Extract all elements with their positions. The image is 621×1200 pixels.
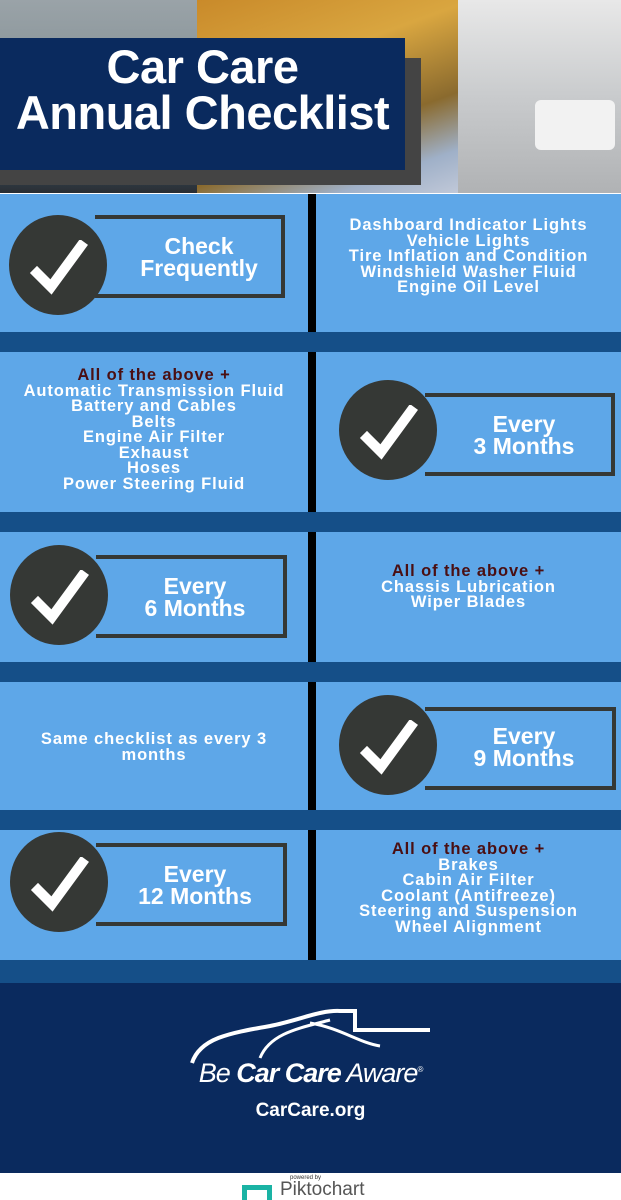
text: 6 month list: Wiper Blades: [411, 593, 526, 611]
text: 3 month list: Power Steering Fluid: [63, 474, 245, 492]
badge: every 9 months: Every: [493, 723, 555, 749]
piktochart: [242, 1174, 364, 1200]
text: frequent list: [348, 216, 588, 296]
text: 9 month: [41, 730, 267, 764]
badge: every 6 months: 6 Months: [145, 595, 245, 621]
text: 3 month list: Engine Air Filter: [83, 428, 225, 446]
panels: [0, 194, 308, 332]
badge: every 12 months: Every: [164, 861, 226, 887]
text: frequent list: Dashboard Indicator Lights: [350, 216, 587, 234]
text: frequent list: Tire Inflation and Condition: [349, 247, 588, 265]
text: 12 month list: All of the above +: [392, 840, 545, 858]
badge: every 3 months: 3 Months: [474, 433, 574, 459]
text: frequent list: Engine Oil Level: [397, 278, 540, 296]
logo: car swoosh: [190, 1008, 430, 1064]
badge: every 6 months: [10, 545, 287, 645]
text: 6 month list: [381, 562, 556, 611]
badge: every 9 months: 9 Months: [474, 745, 574, 771]
title: Annual Checklist: [16, 86, 389, 139]
badge: every 12 months: 12 Months: [138, 883, 252, 909]
text: 3 month list: Hoses: [127, 459, 181, 477]
text: 3 month list: Belts: [132, 412, 176, 430]
text: 6 month list: Chassis Lubrication: [381, 578, 556, 596]
badge: every 12 months: [10, 832, 287, 932]
text: 12 month list: Steering and Suspension: [359, 902, 578, 920]
website: CarCare.org: [256, 1100, 365, 1121]
footer: [0, 983, 621, 1173]
text: 9 month: Same checklist as every 3: [41, 730, 267, 748]
text: 12 month list: [359, 840, 578, 936]
badge: every 3 months: Every: [493, 411, 555, 437]
badge: every 3 months: [339, 380, 615, 480]
text: 12 month list: Cabin Air Filter: [402, 871, 535, 889]
badge: every 6 months: Every: [164, 573, 226, 599]
badge: check frequently: Check: [164, 233, 234, 259]
badge: check frequently: [9, 215, 285, 315]
logo text: Be Car Care Aware®: [199, 1058, 422, 1088]
text: 3 month list: All of the above +: [77, 366, 231, 384]
text: 6 month list: All of the above +: [392, 562, 545, 580]
text: 9 month: months: [122, 746, 186, 764]
piktochart: Piktochart: [280, 1179, 364, 1200]
header photos: [0, 0, 621, 193]
divider lines: [308, 194, 316, 332]
text: 3 month list: Exhaust: [119, 444, 189, 462]
badge: check frequently: Frequently: [140, 255, 258, 281]
text: 12 month list: Wheel Alignment: [395, 918, 542, 936]
title shadow: [0, 58, 421, 185]
title: [0, 38, 405, 170]
text: 12 month list: Coolant (Antifreeze): [381, 886, 556, 904]
text: 3 month list: [24, 366, 284, 492]
text: 3 month list: Battery and Cables: [71, 397, 237, 415]
text: 12 month list: Brakes: [438, 856, 499, 874]
text: frequent list: Windshield Washer Fluid: [360, 262, 577, 280]
title: Car Care: [107, 40, 298, 93]
badge: every 9 months: [339, 695, 616, 795]
text: 3 month list: Automatic Transmission Fluid: [24, 382, 284, 400]
piktochart: powered by: [290, 1175, 321, 1181]
text: frequent list: Vehicle Lights: [407, 232, 530, 250]
